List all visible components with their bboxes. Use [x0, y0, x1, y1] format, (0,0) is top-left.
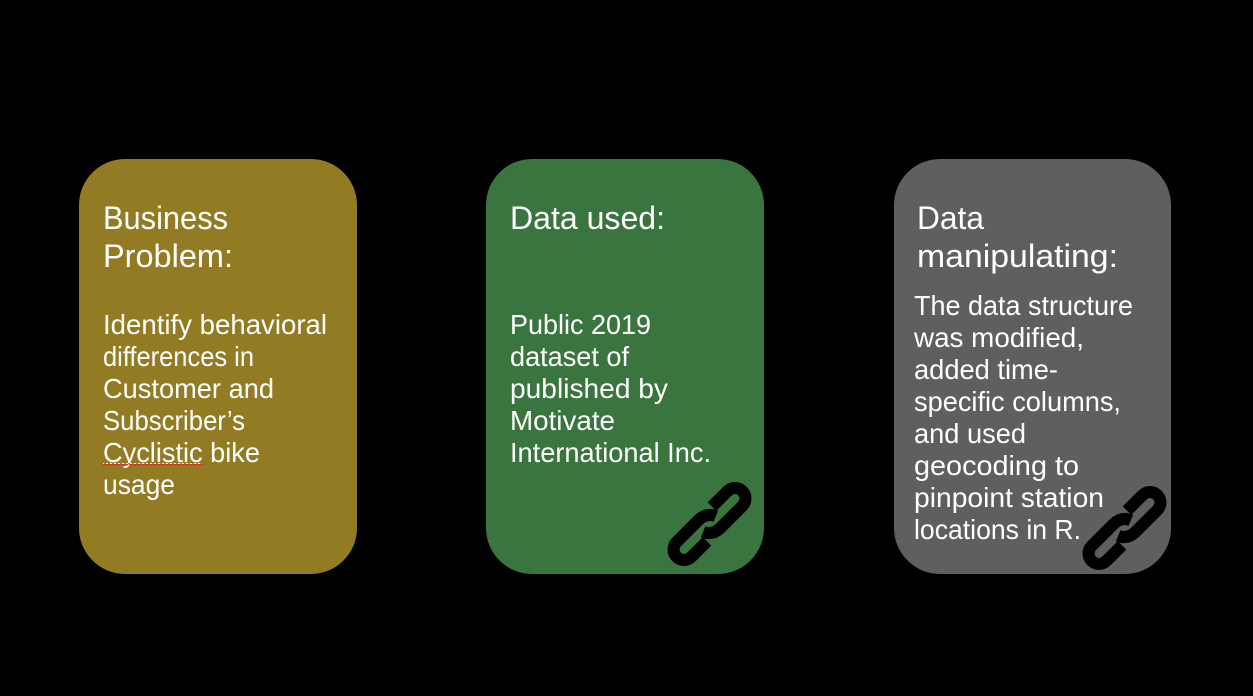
- text: business problem description: Customer and: [103, 373, 274, 404]
- text: data manipulating description: and used: [914, 418, 1026, 449]
- text: data used description: International Inc.: [510, 437, 711, 468]
- text: data manipulating description: locations in R.: [914, 514, 1081, 545]
- panel: business problem: [79, 159, 357, 574]
- heading: business problem: Business: [103, 200, 228, 236]
- text: data manipulating description: pinpoint station: [914, 482, 1104, 513]
- text: data used description: dataset of: [510, 341, 629, 372]
- text: data used description: Motivate: [510, 405, 615, 436]
- heading: business problem: [103, 200, 233, 274]
- icon: chain link: [669, 484, 750, 564]
- spell-check underline: [103, 464, 203, 465]
- panel: data manipulating: [894, 159, 1171, 574]
- heading: data manipulating: [917, 200, 1118, 274]
- text: data manipulating description: geocoding to: [914, 450, 1079, 481]
- text: data used description: [510, 309, 711, 468]
- heading: business problem: Problem:: [103, 238, 233, 274]
- heading: data manipulating: manipulating:: [917, 238, 1118, 274]
- text: data manipulating description: specific columns,: [914, 386, 1121, 417]
- text: business problem description: [103, 309, 327, 500]
- text: business problem description: Identify behavioral: [103, 309, 327, 340]
- text: data manipulating description: [913, 290, 1133, 545]
- text: data manipulating description: The data structure: [914, 290, 1133, 321]
- heading: data manipulating: Data: [917, 200, 985, 236]
- heading: data used: Data used:: [510, 200, 665, 236]
- text: data used description: published by: [510, 373, 668, 404]
- icon: chain link: [1084, 488, 1165, 568]
- text: business problem description: Subscriber’s: [103, 405, 245, 436]
- text: data manipulating description: was modified,: [913, 322, 1084, 353]
- text: data manipulating description: added time-: [914, 354, 1058, 385]
- text: business problem description: differences in: [103, 341, 254, 372]
- text: business problem description: Cyclistic bike: [103, 437, 260, 468]
- text: business problem description: usage: [103, 469, 175, 500]
- text: data used description: Public 2019: [510, 309, 651, 340]
- panel: data used: [486, 159, 764, 574]
